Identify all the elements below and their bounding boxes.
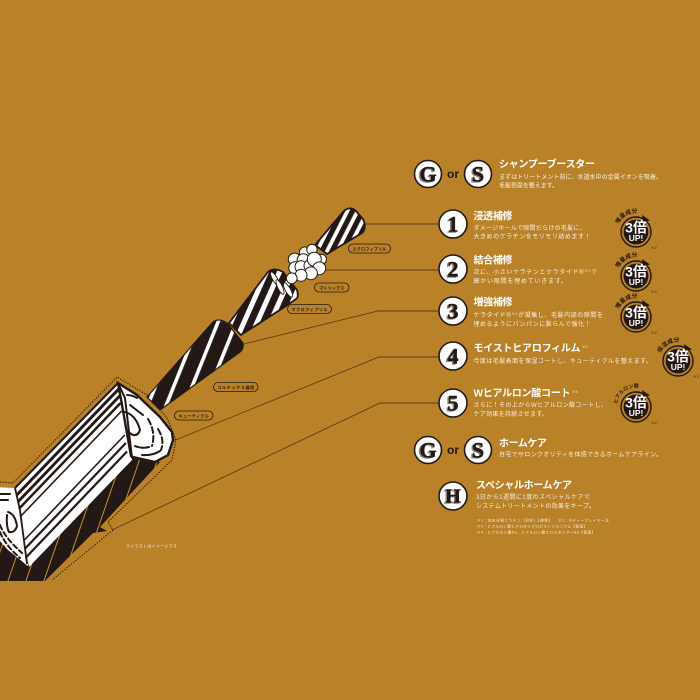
- footnotes: [477, 517, 609, 534]
- number 1: [439, 210, 467, 238]
- cuticle end oval left: [0, 487, 28, 566]
- badge: 3x up step 3: 3倍: [625, 304, 647, 320]
- number 2: 2: [446, 258, 457, 282]
- heading: ホームケア: [499, 438, 547, 450]
- badge: 3x up step 2: 3倍: [625, 264, 647, 280]
- body: 細かい隙間を埋めていきます。: [474, 277, 567, 285]
- body: [474, 311, 603, 328]
- footnote mark: ※4: [572, 390, 578, 394]
- badge S: [464, 436, 492, 464]
- badge S: [464, 160, 492, 188]
- badge: 3x up step 2: [614, 252, 657, 294]
- label: matrix: マトリックス: [319, 284, 344, 290]
- badge H: [439, 482, 467, 510]
- badge: 3x up step 2: 増量成分: [614, 252, 638, 268]
- badge H: H: [444, 486, 460, 508]
- badge: 3x up step 3: UP!: [629, 318, 643, 328]
- number 3: [439, 297, 467, 325]
- badge S: S: [470, 438, 483, 464]
- badge G: [414, 436, 442, 464]
- footnotes: ※4：ヒアルロン酸Na、ヒアルロン酸クロスポリマーNa【保湿】: [477, 529, 595, 534]
- body: まずはトリートメント前に、水道水中の金属イオンを吸着。: [499, 173, 662, 181]
- number 2: [439, 255, 467, 283]
- hair illustration: [0, 208, 365, 581]
- number 1: 1: [448, 212, 458, 236]
- heading: 増強補修: [474, 296, 512, 308]
- badge G: [414, 160, 442, 188]
- cortex cell strand: [147, 320, 243, 410]
- badge: 3x up step 4: ※2: [693, 375, 699, 379]
- body: 大きめのケラチンをモリモリ詰めます！: [474, 232, 590, 240]
- step 1: [439, 210, 590, 240]
- badge: 3x up step 4: UP!: [671, 362, 685, 372]
- heading: Wヒアルロン酸コート: [474, 386, 570, 400]
- shadow of cuticle block: [0, 456, 160, 581]
- cuticle end oval right: [118, 383, 173, 462]
- number 3: 3: [448, 298, 458, 324]
- body: が凝集し、毛髪内部の隙間を: [518, 311, 603, 319]
- body: 今度は毛髪表面を保湿コートし、キューティクルを整えます。: [474, 357, 652, 365]
- step 5: [439, 386, 607, 418]
- number 5: 5: [448, 390, 458, 416]
- badge: 3x up step 1: ※2: [651, 246, 657, 250]
- label: cuticle: [174, 411, 213, 420]
- body: ダメージホールで隙間だらけの毛髪に、: [474, 224, 586, 232]
- label: macrofibril: [288, 304, 332, 314]
- or: or: [447, 167, 459, 181]
- number 4: 4: [446, 344, 457, 370]
- body: 埋めるようにパンパンに膨らんで強化！: [474, 320, 590, 328]
- label: cortex cell: コルテックス細胞: [217, 384, 254, 390]
- body: 次に、小さいケラチンとケラタイド®: [474, 270, 584, 276]
- cuticle block: [15, 383, 132, 567]
- body: [474, 268, 597, 285]
- heading: シャンプーブースター: [499, 158, 595, 170]
- heading: モイストヒアロフィルム: [474, 342, 580, 354]
- or: or: [447, 443, 459, 457]
- badge: 3x up step 5: 3倍: [625, 394, 647, 410]
- body: [476, 493, 595, 510]
- badge: 3x up step 5: [613, 383, 657, 425]
- badge S: S: [472, 438, 484, 462]
- body: で: [591, 269, 597, 276]
- badge G: G: [418, 162, 435, 188]
- footnotes: ※2：Dディープレイヤー比: [558, 517, 609, 522]
- badge: 3x up step 2: ※2: [651, 290, 657, 294]
- number 1: 1: [446, 212, 457, 238]
- badge: 3x up step 3: [614, 293, 657, 335]
- badge: 3x up step 4: 保湿成分: [657, 337, 680, 352]
- footnotes: ※3：ヒアルロン酸ヒドロキシプロピルトリモニウム【保湿】: [477, 523, 587, 528]
- body: さらに！その上からWヒアルロン酸コートし、: [474, 401, 607, 409]
- badge: 3x up step 3: 増量成分: [614, 293, 638, 308]
- step: special home care: [439, 480, 595, 510]
- body: 3日から1週間に1度のスペシャルケアで: [476, 493, 590, 501]
- label: matrix: [314, 283, 349, 292]
- badge: 3x up step 1: [614, 208, 657, 250]
- body: システムトリートメントの効果をキープ。: [476, 502, 595, 510]
- number 3: 3: [446, 300, 457, 324]
- footnotes: ※1：加水分解ケラチン（羽毛）【補修】: [477, 517, 552, 522]
- badge: 3x up step 2: UP!: [629, 277, 643, 287]
- badge S: S: [470, 162, 483, 188]
- body: 毛髪表面を整えます。: [499, 182, 558, 190]
- label: microfibril: ミクロフィブリル: [352, 245, 386, 251]
- badge: 3x up step 1: 3倍: [625, 220, 647, 236]
- number 4: 4: [448, 344, 458, 368]
- label: cuticle: キューティクル: [179, 412, 209, 418]
- heading: スペシャルホームケア: [476, 480, 572, 492]
- badge: 3x up step 3: ※2: [651, 331, 657, 335]
- leader lines: [112, 224, 440, 530]
- step: home care: [414, 436, 662, 464]
- matrix spheres: [286, 244, 326, 284]
- footnote mark: ※3: [582, 345, 588, 349]
- heading: 結合補修: [474, 254, 512, 266]
- body: ケラタイド®: [474, 313, 511, 319]
- label: cortex cell: [214, 382, 258, 392]
- number 2: 2: [448, 256, 458, 282]
- body: 自宅でサロンクオリティを体感できるホームケアライン。: [499, 450, 662, 458]
- cuticle dotted outline: [0, 377, 176, 580]
- step 3: [439, 296, 603, 328]
- body: ※1: [511, 312, 518, 316]
- body: [474, 401, 607, 418]
- badge G: G: [418, 438, 435, 464]
- body: ケア効果を持続させます。: [474, 410, 548, 418]
- badge: 3x up step 4: 3倍: [667, 348, 689, 364]
- label: microfibril: [348, 244, 390, 253]
- badge: 3x up step 5: UP!: [629, 408, 643, 418]
- badge: 3x up step 4: [657, 337, 699, 379]
- number 5: 5: [446, 392, 457, 416]
- badge: 3x up step 5: ※2: [651, 421, 657, 425]
- number 4: [439, 342, 467, 370]
- badge: 3x up step 5: ヒアルロン酸: [613, 383, 639, 403]
- microfibril strand: [315, 208, 365, 254]
- badge G: G: [419, 162, 437, 186]
- badge S: S: [472, 162, 484, 186]
- macrofibril strand: [229, 270, 298, 335]
- badge: 3x up step 1: 増量成分: [614, 208, 638, 224]
- note: illustration is an image: ※イラストはイメージです: [126, 542, 177, 548]
- body: ※1: [584, 269, 590, 273]
- body: [474, 224, 590, 240]
- label: macrofibril: マクロフィブリル: [292, 306, 328, 312]
- heading: 浸透補修: [474, 210, 512, 222]
- body: [499, 173, 662, 190]
- badge G: G: [419, 438, 437, 462]
- number 5: [439, 389, 467, 417]
- step 2: [439, 254, 597, 285]
- step: shampoo booster: [414, 158, 662, 190]
- badge H: H: [445, 486, 461, 508]
- badge: 3x up step 1: UP!: [629, 233, 643, 243]
- step 4: [439, 342, 652, 370]
